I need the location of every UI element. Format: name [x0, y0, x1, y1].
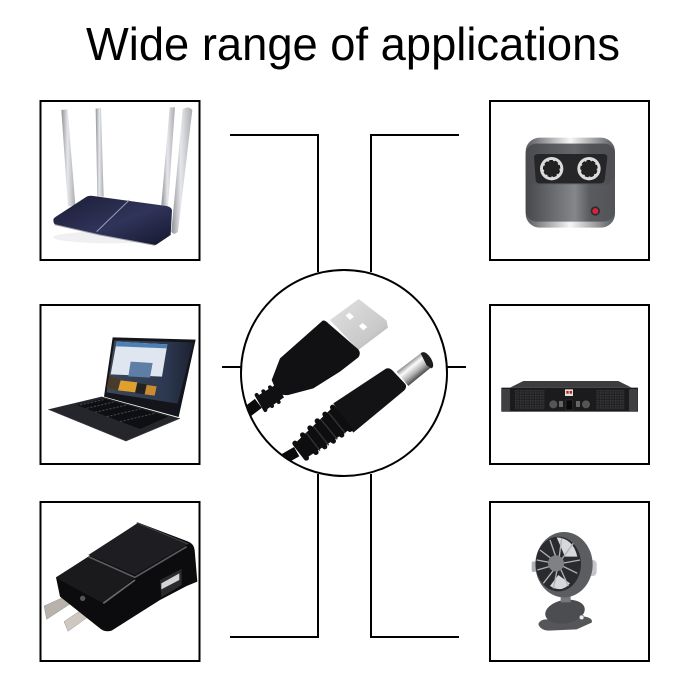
title: Wide range of applications [86, 18, 620, 70]
icon: USB wall charger [44, 523, 197, 631]
panel: charger [40, 502, 200, 661]
panel: router [40, 101, 200, 260]
panel: speaker device [490, 101, 649, 260]
panel: amplifier [490, 305, 649, 464]
icon: amplifier [501, 381, 638, 412]
panel: laptop [40, 305, 200, 464]
infographic canvas [40, 26, 650, 662]
icon: tape device [526, 138, 615, 228]
icon: router [53, 107, 192, 245]
connector lines [222, 135, 466, 637]
panel: fan [490, 502, 649, 661]
panel: center cable circle [240, 270, 447, 476]
icon: USB to DC barrel cable [240, 299, 433, 465]
icon: clip fan [532, 532, 597, 631]
icon: laptop [48, 337, 196, 441]
